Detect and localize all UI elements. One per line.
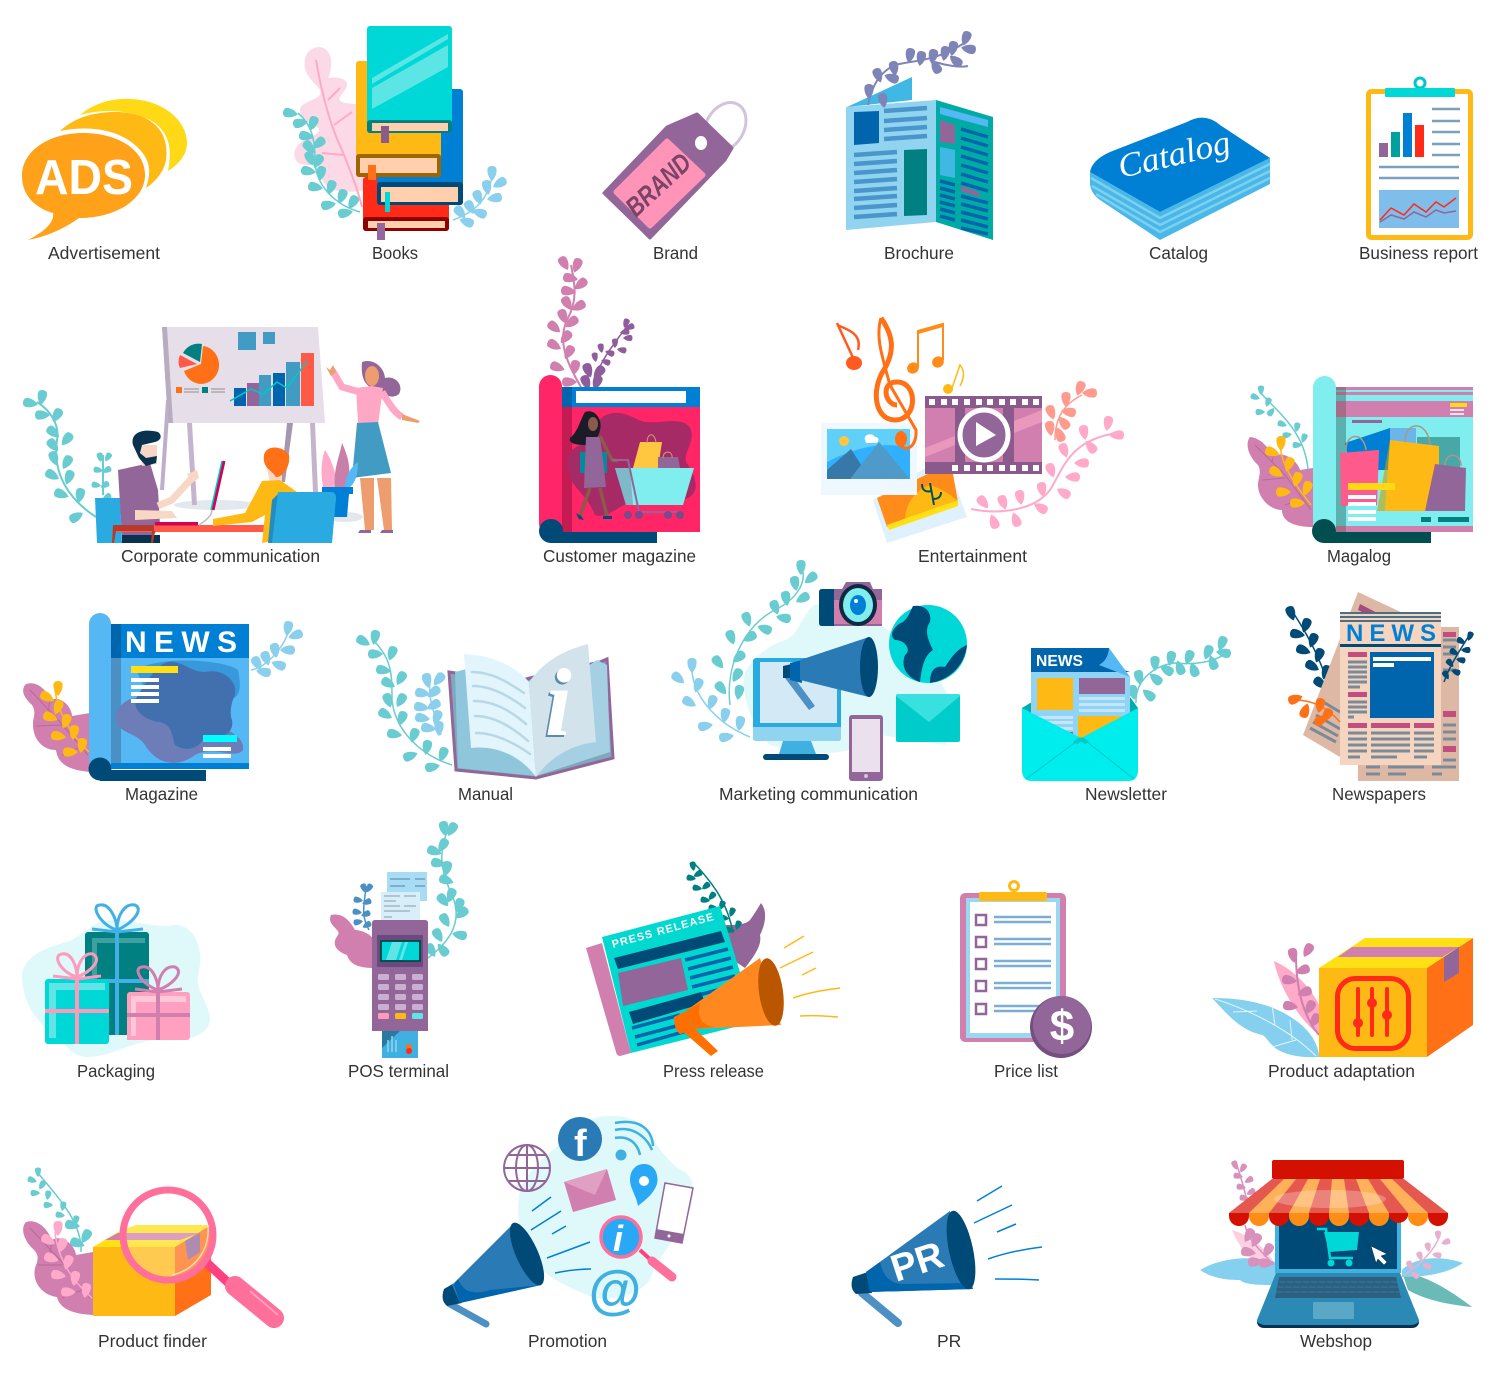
label: Packaging: Packaging [77, 1061, 155, 1081]
plant branches [546, 255, 635, 391]
facebook badge [558, 1117, 602, 1165]
plants [1212, 942, 1322, 1057]
seated man [95, 431, 199, 543]
location pin [630, 1164, 657, 1206]
back papers [1303, 592, 1422, 760]
smartphone [655, 1183, 693, 1243]
treble clef [876, 318, 916, 448]
navy sprig right [1441, 631, 1474, 682]
seated woman and chair [213, 448, 336, 543]
label: Price list: Price list [994, 1061, 1058, 1081]
icon: PR megaphone: PR [886, 1234, 949, 1291]
plants [23, 620, 304, 772]
blue book [377, 89, 463, 212]
icon: newspapers [1284, 592, 1474, 781]
globe [504, 1145, 550, 1191]
megaphone [443, 1218, 551, 1324]
icon: advertisement speech bubbles [22, 99, 187, 240]
blob background [567, 413, 696, 516]
icon: catalog: Catalog [1114, 124, 1234, 186]
dollar coin: $ [1050, 1002, 1074, 1051]
icon: newsletter [1022, 635, 1232, 781]
main newspaper: NEWS [1346, 620, 1436, 647]
terminal body [372, 920, 428, 1031]
newsletter page: NEWS [1036, 653, 1083, 670]
label: Promotion: Promotion [528, 1331, 607, 1351]
computer monitor [753, 658, 841, 760]
icon: business report clipboard [1368, 78, 1470, 238]
icon: brand tag [604, 95, 754, 238]
label: Manual: Manual [458, 784, 513, 804]
label: Magalog: Magalog [1327, 546, 1391, 566]
label: Marketing communication: Marketing communication [719, 784, 918, 804]
plant branches [22, 389, 113, 524]
presenter woman [326, 361, 420, 533]
cardboard box [1319, 938, 1473, 1057]
plants [686, 861, 765, 968]
icon: product adaptation box [1212, 938, 1473, 1057]
sound rays [531, 1197, 591, 1273]
shopping bags [1340, 426, 1466, 511]
newsletter page [1031, 648, 1130, 760]
info magnifier: i [613, 1218, 624, 1259]
icon: brand tag: BRAND [620, 147, 697, 222]
icon: price list clipboard [960, 882, 1092, 1058]
plants [1248, 386, 1314, 527]
plants and leaves [1200, 1160, 1472, 1307]
icon: magazine [23, 613, 304, 781]
dollar coin [1030, 996, 1092, 1058]
label: Product finder: Product finder [98, 1331, 207, 1351]
info glyph: i [543, 651, 570, 758]
icon: stack of books [282, 26, 508, 240]
icon: PR megaphone [852, 1186, 1042, 1323]
sound rays [974, 1186, 1042, 1280]
envelope back [1022, 697, 1138, 740]
laptop [1257, 1215, 1419, 1328]
shop awning [1229, 1160, 1448, 1226]
red book [363, 177, 449, 240]
label: Corporate communication: Corporate communication [121, 546, 320, 566]
presentation board [162, 327, 325, 505]
icon: catalog [1090, 118, 1270, 240]
camera [819, 582, 882, 626]
plant branches [971, 380, 1124, 530]
icon: customer magazine [539, 255, 700, 543]
pages [464, 654, 536, 777]
at sign: @ [589, 1260, 641, 1320]
plants [330, 820, 470, 968]
orange book [356, 61, 441, 180]
navy plant left [1284, 605, 1333, 692]
label: Advertisement: Advertisement [48, 243, 160, 263]
orange sprig [1287, 692, 1340, 728]
cardboard box [93, 1225, 211, 1316]
label: Books: Books [372, 243, 418, 263]
photo frames [821, 423, 967, 543]
film strip with play button [925, 396, 1042, 474]
label: PR: PR [937, 1331, 961, 1351]
label: Product adaptation: Product adaptation [1268, 1061, 1415, 1081]
icon: advertisement speech bubbles: ADS [35, 151, 133, 205]
magnifying glass [123, 1190, 278, 1318]
pink gift [127, 967, 190, 1040]
cover [449, 659, 613, 778]
label: Webshop: Webshop [1300, 1331, 1372, 1351]
cyan gift [45, 954, 109, 1044]
label: Newsletter: Newsletter [1085, 784, 1167, 804]
label: Newspapers: Newspapers [1332, 784, 1426, 804]
icon: promotion [443, 1116, 693, 1324]
payment card [382, 1031, 418, 1058]
receipts [381, 872, 427, 929]
icon: entertainment [821, 318, 1124, 543]
mouse cursor [1371, 1246, 1387, 1265]
main newspaper [1340, 612, 1441, 765]
icon: packaging gift boxes [22, 905, 210, 1057]
blobs [116, 661, 243, 763]
plant branches [670, 560, 819, 743]
sound rays [780, 936, 840, 1017]
shopping cart [1317, 1229, 1359, 1266]
envelope [564, 1169, 616, 1212]
cyan book [367, 26, 452, 143]
shopping woman [570, 411, 618, 520]
teal gift [85, 905, 149, 1035]
info glyph: i [545, 649, 572, 756]
label: Catalog: Catalog [1149, 243, 1208, 263]
envelope front [1022, 708, 1138, 781]
masthead [562, 387, 700, 407]
icon: manual book [355, 629, 613, 778]
masthead: NEWS [125, 626, 237, 659]
pie chart [178, 344, 219, 384]
label: Brochure: Brochure [884, 243, 954, 263]
label: Press release: Press release [663, 1061, 764, 1081]
icon: brochure [846, 30, 993, 240]
orange megaphone [674, 957, 788, 1056]
shopping cart and bags [612, 435, 694, 519]
icon: marketing communication [670, 560, 967, 781]
label: Magazine: Magazine [125, 784, 198, 804]
page edges [455, 668, 536, 776]
header bands [1336, 387, 1473, 532]
envelope [896, 694, 960, 742]
info magnifier [601, 1217, 672, 1277]
icon: POS terminal [330, 820, 470, 1058]
icon: magalog [1248, 376, 1473, 543]
music notes [837, 323, 963, 394]
globe [889, 605, 967, 683]
icon: webshop laptop [1200, 1160, 1472, 1328]
newspaper [586, 906, 755, 1056]
label: Customer magazine: Customer magazine [543, 546, 696, 566]
facebook badge: f [574, 1123, 587, 1165]
sliders icon [1338, 978, 1408, 1048]
checklist [976, 915, 1051, 1014]
icon: press release [586, 861, 840, 1056]
label: Brand: Brand [653, 243, 698, 263]
smartphone [849, 715, 883, 781]
plants [23, 1168, 93, 1315]
icon: product finder [23, 1168, 278, 1318]
bar chart [230, 353, 314, 406]
desk and laptop [112, 461, 266, 543]
label: Business report: Business report [1359, 243, 1478, 263]
potted plant [322, 443, 358, 517]
label: Entertainment: Entertainment [918, 546, 1027, 566]
newspaper: PRESS RELEASE [611, 911, 715, 951]
wifi signal [615, 1122, 653, 1160]
label: POS terminal: POS terminal [348, 1061, 449, 1081]
megaphone [783, 637, 878, 710]
plants [355, 629, 452, 773]
icon: corporate communication scene [22, 327, 420, 543]
